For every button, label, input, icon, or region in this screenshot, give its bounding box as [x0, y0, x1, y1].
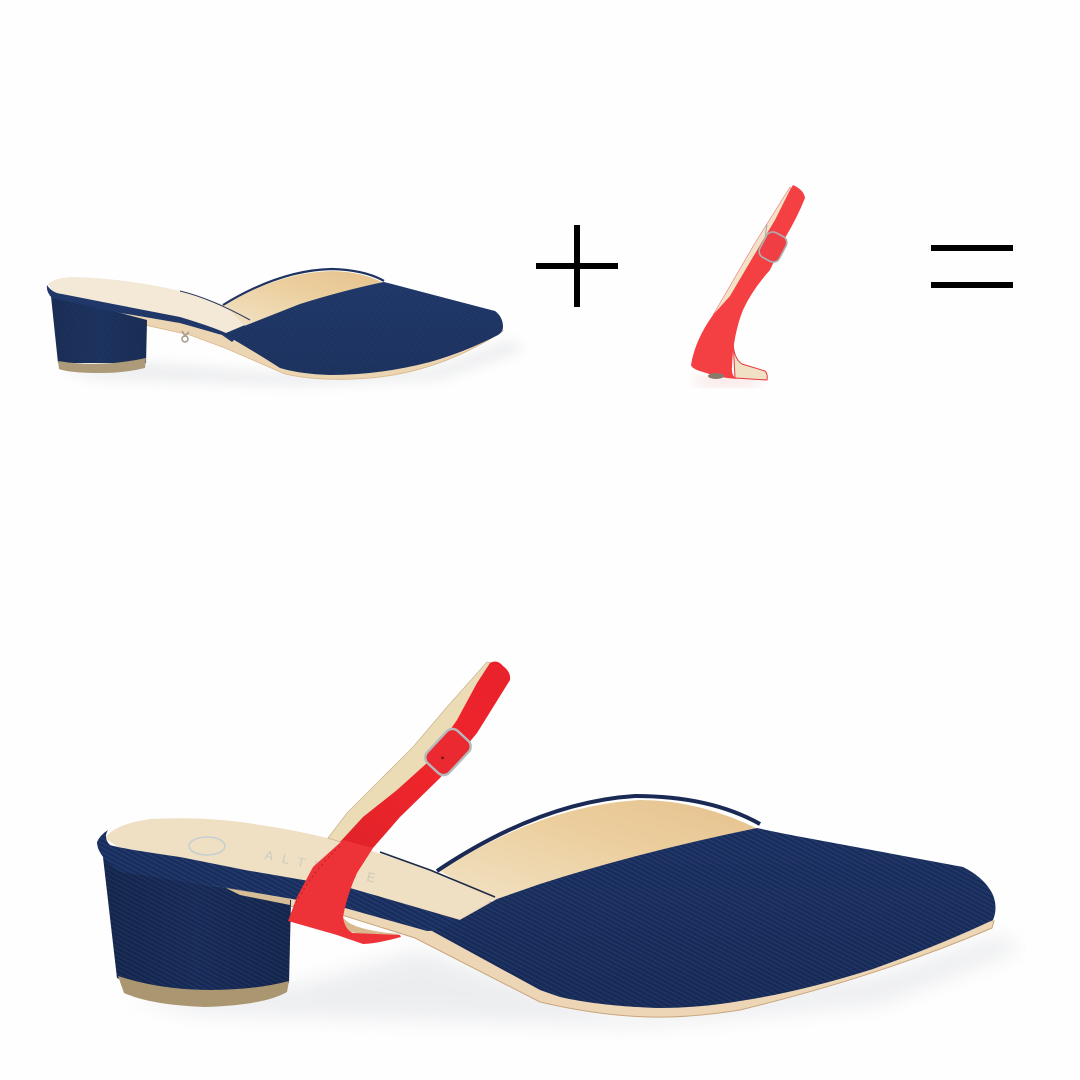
strap patent upper	[340, 662, 510, 848]
small shoe heel block	[51, 296, 147, 363]
heel slit	[226, 888, 290, 905]
small denim mule shoe	[47, 269, 525, 386]
large shoe shadow	[125, 935, 1020, 1026]
large shoe with red strap	[97, 662, 1020, 1026]
equals sign	[931, 245, 1013, 288]
strap stud	[708, 373, 724, 379]
small shoe collar band	[47, 285, 252, 342]
small shoe heel pull	[182, 331, 189, 342]
strap loop inner	[343, 917, 400, 940]
large shoe collar band	[97, 830, 505, 931]
insole brand mark	[189, 837, 386, 887]
strap buckle	[752, 224, 791, 265]
small shoe insole	[48, 277, 252, 333]
small shoe heel base	[58, 358, 146, 373]
strap red body	[691, 185, 805, 379]
insole brand mark: ALTERRE	[263, 847, 386, 887]
large shoe heel base	[118, 976, 289, 1007]
strap insole tab	[733, 340, 767, 380]
plus sign	[536, 225, 618, 307]
strap lining	[713, 187, 794, 315]
strap lining large	[328, 662, 497, 845]
small shoe topline piping	[223, 269, 384, 305]
small shoe vamp	[224, 282, 503, 375]
large shoe heel block	[103, 857, 291, 992]
large shoe insole	[105, 818, 497, 919]
large shoe vamp	[432, 828, 996, 1008]
strap shadow	[692, 378, 764, 384]
strap buckle large	[422, 726, 474, 778]
small red strap accessory	[691, 185, 805, 384]
large shoe topline piping	[437, 796, 760, 871]
large shoe midsole	[228, 886, 994, 1017]
small shoe inner lining	[225, 271, 385, 326]
shadow under small shoe	[55, 340, 525, 386]
small shoe midsole	[113, 310, 503, 379]
strap stitching	[294, 846, 340, 906]
large shoe inner lining	[440, 800, 760, 902]
strap matte lower	[288, 840, 401, 944]
